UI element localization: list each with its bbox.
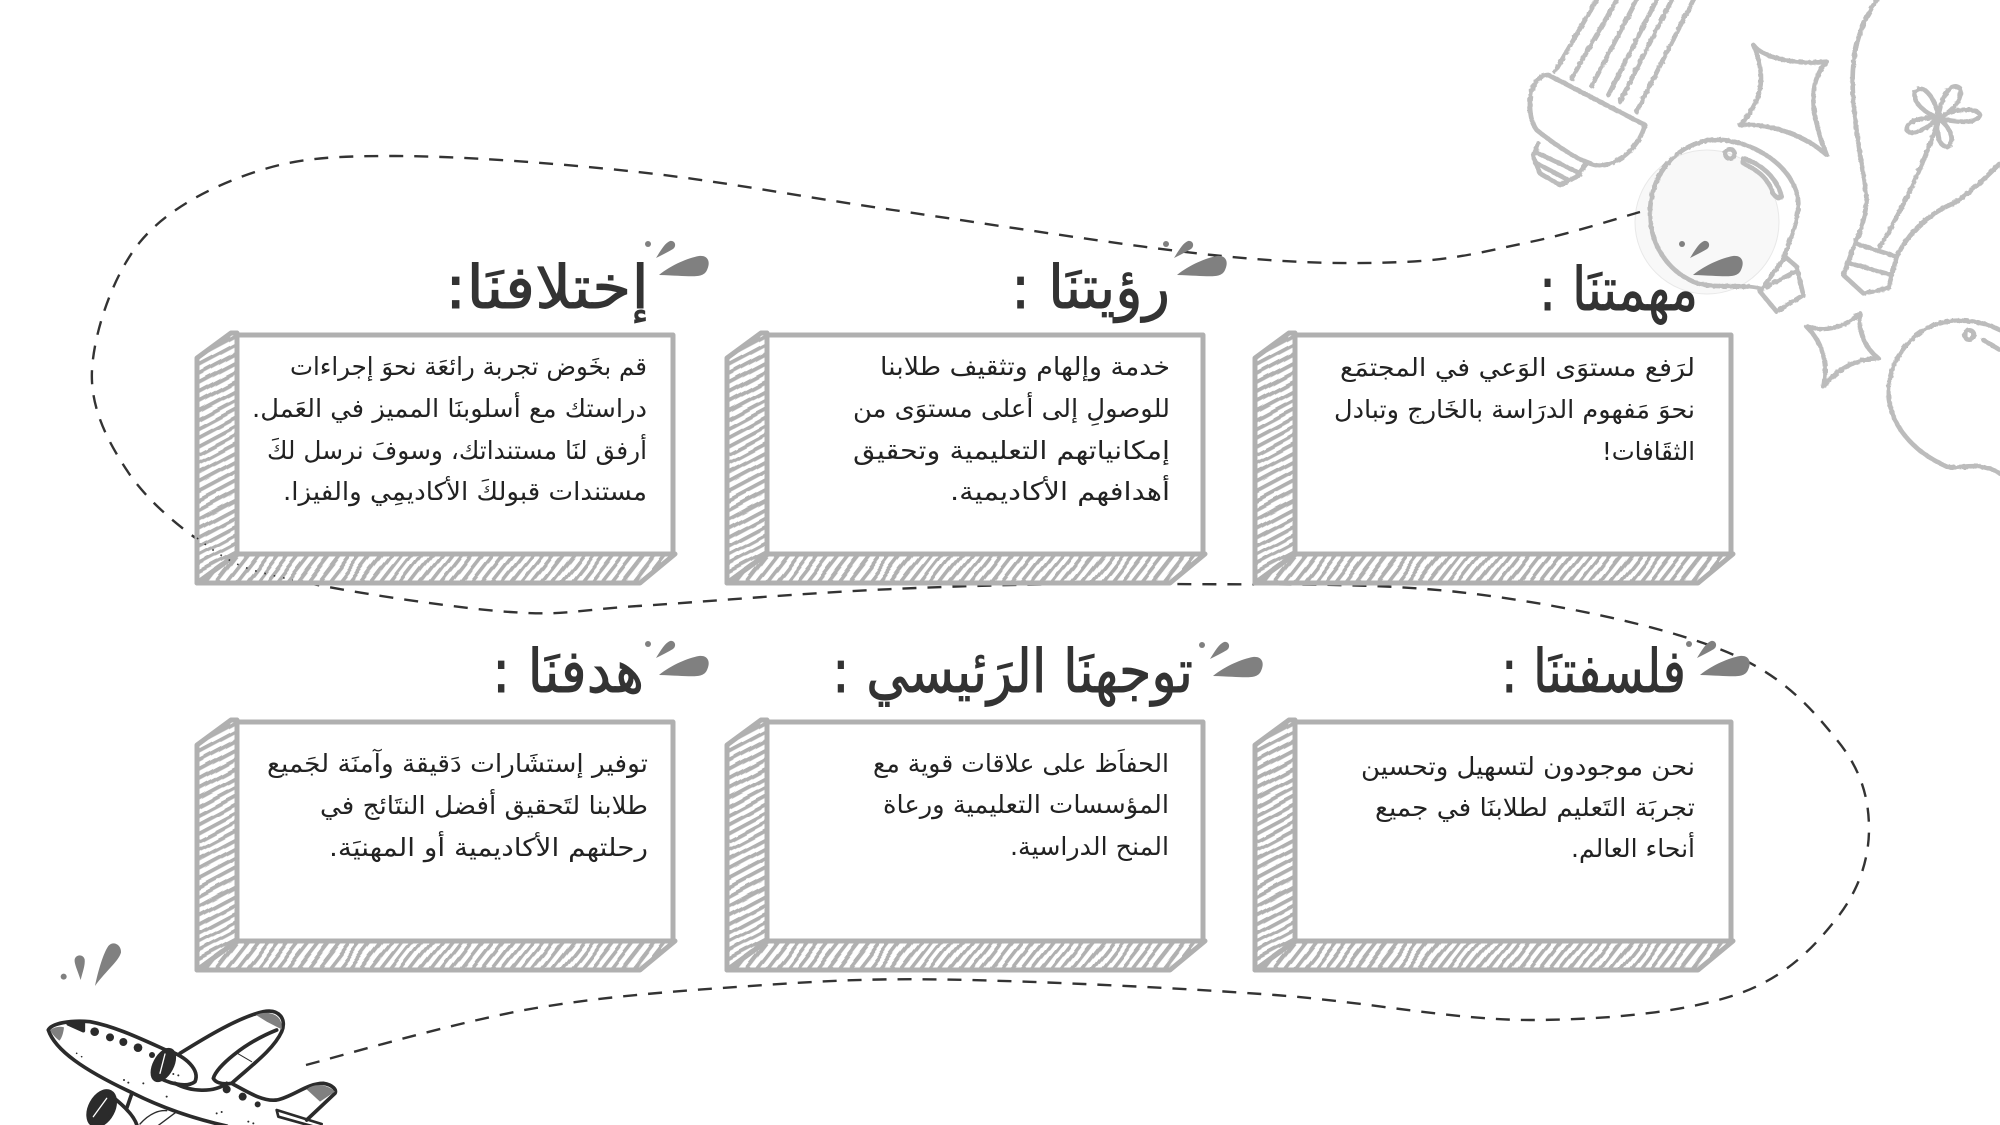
heading: رؤيتنَا : bbox=[1011, 253, 1170, 323]
card frame bbox=[197, 333, 675, 583]
body text: للوصولِ إلى أعلى مستوَى من bbox=[853, 391, 1170, 426]
dashed flight route bbox=[92, 156, 1869, 1065]
body text bbox=[873, 749, 1169, 862]
panel: our mission bbox=[1255, 241, 1743, 583]
icon: star small bbox=[1807, 313, 1878, 387]
icon: cut off bulb bbox=[1888, 321, 2000, 473]
card frame bbox=[727, 720, 1205, 970]
heading splash icon bbox=[645, 241, 709, 276]
body text bbox=[252, 352, 647, 507]
panel: our difference bbox=[197, 241, 709, 583]
body text: إمكانياتهم التعليمية وتحقيق bbox=[853, 436, 1170, 466]
body text: نحن موجودون لتسهيل وتحسين bbox=[1361, 752, 1695, 782]
card frame bbox=[1255, 720, 1733, 970]
icon: glowing bulb highlight disc bbox=[1635, 150, 1779, 294]
heading splash icon bbox=[645, 641, 709, 676]
panel: our main direction bbox=[727, 637, 1263, 970]
icon: flower bulb bbox=[1843, 0, 2000, 293]
body text: الثقَافات! bbox=[1602, 437, 1695, 466]
airplane drawing bbox=[48, 1011, 335, 1125]
heading: توجهنَا الرَئيسي : bbox=[832, 637, 1193, 707]
body text: أهدافهم الأكاديمية. bbox=[950, 474, 1170, 507]
body text bbox=[853, 352, 1170, 507]
body text bbox=[267, 748, 648, 863]
splash above airplane bbox=[61, 943, 121, 986]
body text bbox=[1334, 353, 1695, 466]
card frame bbox=[1255, 333, 1733, 583]
body text: لرَفع مستوَى الوَعي في المجتمَع bbox=[1340, 353, 1695, 383]
heading splash icon bbox=[1163, 241, 1227, 276]
body text: المنح الدراسية. bbox=[1010, 832, 1169, 862]
body text: دراستك مع أسلوبنَا المميز في العَمل. bbox=[252, 391, 647, 424]
body text: رحلتهم الأكاديمية أو المهنيَة. bbox=[329, 830, 648, 863]
card frame bbox=[197, 720, 675, 970]
panel: our vision bbox=[727, 241, 1227, 583]
background doodles: light bulbs and stars bbox=[1530, 0, 2000, 473]
icon: striped light bulb bbox=[1530, 0, 1693, 185]
body text bbox=[1361, 752, 1695, 864]
body text: نحوَ مَفهوم الدرَاسة بالخَارج وتبادل bbox=[1334, 395, 1695, 425]
heading splash icon bbox=[1686, 641, 1750, 676]
panel: our philosophy bbox=[1255, 637, 1750, 970]
heading: هدفنَا : bbox=[492, 637, 644, 707]
body text: الحفاَظ على علاقات قوية مع bbox=[873, 749, 1169, 779]
body text: أنحاء العالم. bbox=[1571, 831, 1695, 864]
body text: تجربَة التَعليم لطلابنَا في جميع bbox=[1375, 793, 1695, 823]
body text: طلابنا لتَحقيق أفضل النتَائج في bbox=[320, 788, 648, 821]
body text: خدمة وإلهام وتثقيف طلابنا bbox=[880, 352, 1170, 382]
heading splash icon bbox=[1679, 241, 1743, 276]
heading: مهمتنَا : bbox=[1539, 255, 1698, 325]
body text: قم بخَوض تجربة رائعَة نحوَ إجراءات bbox=[290, 352, 647, 382]
body text: أرفق لنَا مستنداتك، وسوفَ نرسل لكَ bbox=[267, 433, 647, 466]
heading: فلسفتنَا : bbox=[1501, 637, 1686, 707]
icon: round bulb bbox=[1650, 140, 1803, 312]
icon: star large bbox=[1740, 45, 1827, 155]
body text: مستندات قبولكَ الأكاديمِي والفيزا. bbox=[283, 475, 647, 507]
route remnant over hatched card corner bbox=[197, 538, 293, 580]
body text: توفير إستشَارات دَقيقة وآمنَة لجَميع bbox=[267, 748, 648, 779]
heading splash icon bbox=[1199, 642, 1263, 677]
panel: our goal bbox=[197, 637, 709, 970]
icon: airplane with splash bbox=[48, 943, 335, 1125]
body text: المؤسسات التعليمية ورعاة bbox=[883, 790, 1169, 820]
heading: إختلافنَا: bbox=[445, 253, 649, 323]
card frame bbox=[727, 333, 1205, 583]
